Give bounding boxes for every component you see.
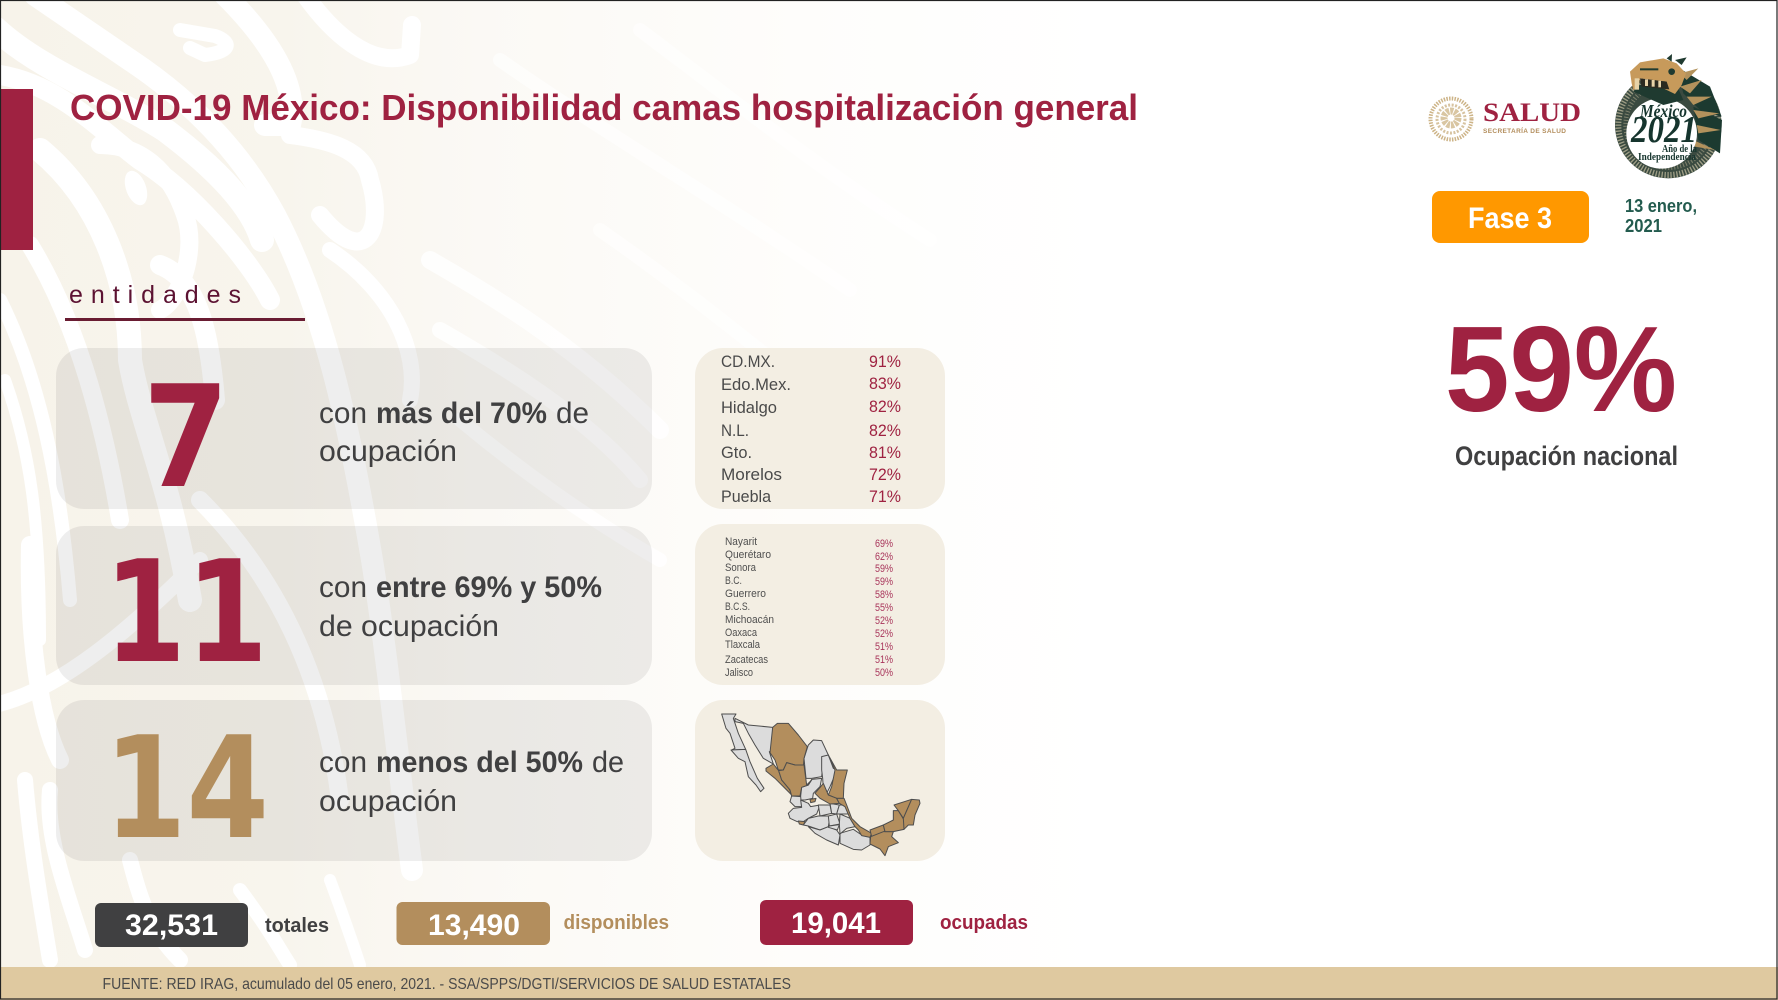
date: 13 enero, bbox=[1625, 196, 1697, 216]
panel: states between 69% and 50%: Nayarit bbox=[725, 536, 757, 548]
panel: states above 70%: Gto. bbox=[721, 443, 752, 462]
stat: total beds: 32,531 bbox=[125, 909, 218, 942]
national occupancy figure: 59% bbox=[1445, 301, 1677, 437]
panel: states between 69% and 50%: B.C.S. bbox=[725, 601, 750, 613]
stat: available beds: 13,490 bbox=[428, 909, 520, 942]
stat: occupied beds bbox=[760, 900, 1028, 945]
badge: Fase 3: Fase 3 bbox=[1468, 202, 1552, 235]
panel: states between 69% and 50%: 50% bbox=[875, 667, 893, 679]
panel: states above 70%: CD.MX. bbox=[721, 352, 775, 371]
description: de bbox=[556, 397, 589, 430]
description: entre 69% y 50% bbox=[376, 571, 602, 604]
panel: states above 70%: 81% bbox=[869, 443, 901, 462]
panel: states above 70%: Hidalgo bbox=[721, 398, 777, 417]
panel: states between 69% and 50%: 55% bbox=[875, 602, 893, 614]
panel: states between 69% and 50%: 51% bbox=[875, 654, 893, 666]
number 7: 7 bbox=[143, 356, 229, 520]
panel: states between 69% and 50%: 51% bbox=[875, 641, 893, 653]
description: de ocupación bbox=[319, 610, 499, 643]
panel: states between 69% and 50%: Tlaxcala bbox=[725, 639, 761, 651]
panel: states between 69% and 50%: Querétaro bbox=[725, 549, 771, 561]
footer source bar bbox=[0, 967, 1778, 1000]
stat: total beds: totales bbox=[265, 915, 329, 937]
panel: states above 70%: 71% bbox=[869, 487, 901, 506]
panel: states between 69% and 50%: Guerrero bbox=[725, 588, 766, 600]
panel: states between 69% and 50%: 59% bbox=[875, 576, 893, 588]
badge: Fase 3 bbox=[1432, 191, 1589, 243]
logo: Salud: SECRETARÍA DE SALUD bbox=[1483, 126, 1566, 135]
stat: occupied beds: 19,041 bbox=[791, 907, 881, 940]
logo: México 2021 serpent bbox=[1615, 54, 1722, 178]
panel: states between 69% and 50%: 52% bbox=[875, 628, 893, 640]
panel: states between 69% and 50%: 58% bbox=[875, 589, 893, 601]
description: con bbox=[319, 746, 367, 779]
panel: states between 69% and 50%: Jalisco bbox=[725, 667, 753, 679]
logo: México 2021 serpent: Año de la bbox=[1662, 144, 1697, 155]
description: menos del 50% bbox=[376, 746, 583, 779]
panel: states above 70%: Edo.Mex. bbox=[721, 375, 791, 394]
stat: total beds bbox=[95, 903, 329, 947]
panel: states between 69% and 50%: 59% bbox=[875, 563, 893, 575]
panel: states above 70%: Puebla bbox=[721, 487, 772, 506]
description: más del 70% bbox=[376, 397, 547, 430]
panel: states between 69% and 50%: 52% bbox=[875, 615, 893, 627]
stat: available beds: disponibles bbox=[564, 912, 669, 934]
logo text: México bbox=[1639, 101, 1687, 121]
panel: states between 69% and 50%: 69% bbox=[875, 538, 893, 550]
number 11: 11 bbox=[104, 531, 268, 695]
panel: states between 69% and 50%: B.C. bbox=[725, 575, 742, 587]
panel: states above 70%: 83% bbox=[869, 374, 901, 393]
panel: states between 69% and 50%: Sonora bbox=[725, 562, 757, 574]
description: con bbox=[319, 397, 367, 430]
panel: states above 70%: 82% bbox=[869, 421, 901, 440]
description: con bbox=[319, 571, 367, 604]
panel: map of Mexico bbox=[695, 700, 945, 861]
panel: states above 70%: 82% bbox=[869, 397, 901, 416]
accent bar bbox=[1, 89, 33, 250]
panel: between 69% and 50% bbox=[56, 526, 652, 695]
section heading: entidades bbox=[65, 281, 305, 321]
number 14: 14 bbox=[104, 707, 269, 871]
description: ocupación bbox=[319, 785, 457, 818]
stat: available beds bbox=[396, 902, 669, 945]
stat: occupied beds: ocupadas bbox=[940, 912, 1028, 934]
panel: states between 69% and 50% bbox=[695, 524, 945, 685]
title: COVID-19 México: Disponibilidad camas hospitalización general bbox=[70, 87, 1138, 128]
panel: states above 70%: 72% bbox=[869, 465, 901, 484]
footer source bar: FUENTE: RED IRAG, acumulado del 05 enero, 2021. - SSA/SPPS/DGTI/SERVICIOS DE SALUD ESTATALES bbox=[102, 976, 791, 993]
panel: states above 70%: N.L. bbox=[721, 421, 749, 440]
panel: states between 69% and 50%: Oaxaca bbox=[725, 627, 758, 639]
description: ocupación bbox=[319, 435, 457, 468]
panel: states above 70%: Morelos bbox=[721, 465, 782, 484]
panel: more than 70% bbox=[56, 348, 652, 520]
panel: states between 69% and 50%: 62% bbox=[875, 551, 893, 563]
panel: states between 69% and 50%: Michoacán bbox=[725, 614, 774, 626]
date: 2021 bbox=[1625, 216, 1662, 236]
logo: México 2021 serpent: Independencia bbox=[1638, 152, 1696, 163]
logo: México 2021 serpent: 2021 bbox=[1630, 109, 1697, 151]
panel: states between 69% and 50%: Zacatecas bbox=[725, 654, 768, 666]
national occupancy figure: Ocupación nacional bbox=[1455, 441, 1678, 471]
logo: Salud: SALUD bbox=[1483, 98, 1581, 127]
description: de bbox=[592, 746, 624, 779]
panel: states above 70%: 91% bbox=[869, 352, 901, 371]
panel: less than 50% bbox=[56, 700, 652, 871]
panel: states above 70% bbox=[695, 348, 945, 509]
logo: Salud bbox=[1430, 98, 1581, 140]
icon: national seal bbox=[1430, 98, 1472, 140]
section heading: entidades: entidades bbox=[69, 281, 241, 309]
